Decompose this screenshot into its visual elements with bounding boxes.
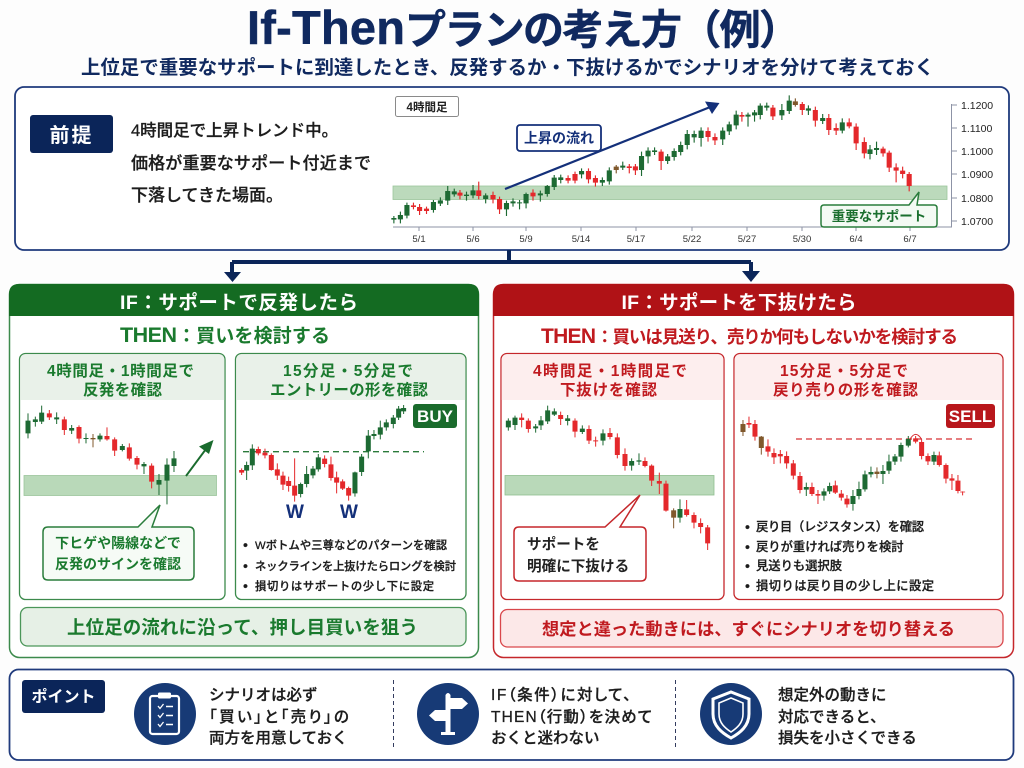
text: point 3: 想定外の動きに bbox=[778, 686, 887, 704]
sub-panel heading: 15分足・5分足で bbox=[283, 362, 413, 380]
y axis labels: 1.0700 bbox=[961, 216, 993, 228]
callout: rebound signs: 反発のサインを確認 bbox=[55, 556, 181, 572]
sub-panel heading: 反発を確認 bbox=[83, 380, 162, 399]
then heading: THEN bbox=[120, 323, 177, 347]
sub-panel heading: 下抜けを確認 bbox=[560, 380, 657, 399]
break chart bbox=[505, 406, 714, 550]
entry bullets: • bbox=[243, 578, 248, 594]
sub-panel heading bbox=[533, 362, 687, 399]
arrows: branch to scenarios bbox=[224, 250, 760, 282]
arrow: upward flow bbox=[505, 102, 720, 189]
premise text: 下落してきた場面。 bbox=[131, 186, 283, 205]
takeaway: buy the dip bbox=[20, 608, 466, 646]
pullback chart bbox=[743, 404, 995, 511]
callout: rebound signs bbox=[43, 505, 194, 580]
takeaway: switch scenario: 想定と違った動きには、すぐにシナリオを切り替える bbox=[542, 619, 955, 639]
panel: points bbox=[10, 670, 1014, 760]
x axis labels: 5/30 bbox=[793, 234, 811, 245]
label: upward flow bbox=[517, 125, 601, 151]
panel header bbox=[493, 284, 1014, 316]
sell bullets: • bbox=[745, 578, 750, 594]
panel header: IF：サポートで反発したら bbox=[120, 292, 358, 314]
x axis labels: 6/7 bbox=[903, 234, 917, 245]
sell bullets bbox=[745, 518, 934, 594]
entry bullets: ネックラインを上抜けたらロングを検討 bbox=[255, 559, 456, 573]
y axis labels: 1.0800 bbox=[961, 193, 993, 205]
sub-panel heading: 戻り売りの形を確認 bbox=[773, 380, 918, 399]
premise text: 4時間足で上昇トレンド中。 bbox=[131, 121, 338, 140]
panel header bbox=[9, 284, 479, 316]
entry bullets: • bbox=[243, 558, 248, 574]
text: point 1: シナリオは必ず bbox=[209, 686, 318, 704]
callout: rebound signs: 下ヒゲや陽線などで bbox=[55, 535, 181, 551]
callout: break: 明確に下抜ける bbox=[527, 557, 629, 575]
icon: shield bbox=[700, 683, 762, 745]
sell bullets: • bbox=[745, 558, 750, 574]
then heading: ：買いは見送り、売りか何もしないかを検討する bbox=[596, 327, 958, 347]
W labels: W bbox=[340, 502, 358, 523]
text: point 2 bbox=[491, 686, 652, 747]
x axis labels bbox=[412, 234, 917, 245]
panel header: IF：サポートを下抜けたら bbox=[622, 292, 856, 314]
y axis labels: 1.1000 bbox=[961, 146, 993, 158]
entry bullets: 損切りはサポートの少し下に設定 bbox=[255, 579, 434, 593]
premise badge bbox=[30, 115, 113, 153]
takeaway: switch scenario bbox=[500, 610, 1003, 647]
entry bullets bbox=[243, 536, 456, 594]
text: point 3: 損失を小さくできる bbox=[778, 729, 917, 747]
x axis labels: 5/6 bbox=[466, 234, 480, 245]
rebound chart bbox=[24, 406, 216, 504]
sub-panel heading: 4時間足・1時間足で bbox=[533, 362, 687, 380]
premise text: 価格が重要なサポート付近まで bbox=[131, 153, 371, 173]
W labels: W bbox=[286, 502, 304, 523]
premise text bbox=[131, 121, 371, 205]
SELL badge: SELL bbox=[949, 407, 992, 426]
entry bullets: • bbox=[243, 536, 248, 552]
sell bullets: 損切りは戻り目の少し上に設定 bbox=[756, 578, 934, 593]
panel: IF break bbox=[493, 284, 1014, 658]
text: point 1 bbox=[209, 686, 349, 747]
x axis labels: 5/22 bbox=[683, 234, 701, 245]
title: プランの考え方（例） bbox=[405, 7, 800, 53]
x axis labels: 5/27 bbox=[738, 234, 756, 245]
sell bullets: 戻りが重ければ売りを検討 bbox=[756, 539, 904, 554]
W labels bbox=[286, 502, 358, 523]
sub-panel: confirm break bbox=[501, 354, 724, 600]
icon: clipboard bbox=[134, 683, 196, 745]
x axis labels: 6/4 bbox=[849, 234, 863, 245]
label: upward flow: 上昇の流れ bbox=[524, 130, 594, 146]
x axis labels: 5/1 bbox=[412, 234, 426, 245]
points badge: ポイント bbox=[31, 688, 96, 706]
text: point 2: THEN（行動）を決めて bbox=[491, 708, 652, 726]
callout: important support bbox=[821, 192, 937, 227]
premise badge: 前提 bbox=[50, 124, 94, 147]
text: point 3 bbox=[778, 686, 917, 747]
double bottom chart bbox=[242, 404, 457, 523]
text: point 1: 「買い」と「売り」の bbox=[209, 708, 349, 726]
points badge bbox=[22, 680, 105, 713]
BUY badge: BUY bbox=[417, 407, 454, 426]
candles bbox=[394, 95, 909, 223]
callout: break bbox=[514, 495, 646, 581]
arrow: rebound bbox=[186, 440, 214, 476]
chart: 4 hour candlesticks bbox=[393, 95, 993, 245]
y axis labels bbox=[961, 100, 993, 228]
text: point 1: 両方を用意しておく bbox=[209, 729, 348, 747]
then heading: THEN bbox=[541, 325, 596, 348]
sub-panel: entry shape bbox=[236, 354, 466, 600]
sell bullets: • bbox=[745, 538, 750, 554]
timeframe label bbox=[396, 96, 458, 116]
text: point 3: 対応できると、 bbox=[778, 708, 886, 726]
text: point 2: おくと迷わない bbox=[491, 729, 600, 747]
sell bullets: • bbox=[745, 518, 750, 534]
sub-panel heading bbox=[47, 362, 194, 399]
x axis labels: 5/9 bbox=[519, 234, 533, 245]
y axis labels: 1.1200 bbox=[961, 100, 993, 112]
x axis labels: 5/17 bbox=[627, 234, 645, 245]
sub-panel heading bbox=[773, 362, 918, 399]
subtitle: 上位足で重要なサポートに到達したとき、反発するか・下抜けるかでシナリオを分けて考えておく bbox=[81, 56, 934, 79]
callout: important support: 重要なサポート bbox=[832, 209, 926, 224]
panel: premise bbox=[15, 87, 1009, 250]
sell bullets: 見送りも選択肢 bbox=[756, 558, 843, 573]
entry bullets: Wボトムや三尊などのパターンを確認 bbox=[255, 538, 448, 552]
text: point 2: IF（条件）に対して、 bbox=[491, 686, 631, 704]
icon: signpost bbox=[417, 683, 479, 745]
sub-panel heading bbox=[270, 362, 428, 399]
panel: IF rebound bbox=[9, 284, 479, 658]
callout: break: サポートを bbox=[527, 536, 600, 553]
sub-panel heading: エントリーの形を確認 bbox=[270, 380, 428, 399]
support band bbox=[393, 186, 947, 200]
timeframe label: 4時間足 bbox=[407, 100, 448, 114]
axes bbox=[393, 104, 957, 231]
then heading: ：買いを検討する bbox=[177, 325, 330, 347]
sub-panel heading: 4時間足・1時間足で bbox=[47, 362, 194, 380]
y axis labels: 1.0900 bbox=[961, 169, 993, 181]
title: If-Then bbox=[247, 1, 405, 54]
sub-panel: pullback sell bbox=[734, 354, 1003, 600]
sell bullets: 戻り目（レジスタンス）を確認 bbox=[756, 519, 925, 534]
takeaway: buy the dip: 上位足の流れに沿って、押し目買いを狙う bbox=[67, 617, 418, 638]
BUY badge bbox=[413, 404, 457, 428]
x axis labels: 5/14 bbox=[572, 234, 590, 245]
y axis labels: 1.1100 bbox=[961, 123, 992, 135]
sub-panel: confirm rebound bbox=[20, 354, 225, 600]
sub-panel heading: 15分足・5分足で bbox=[780, 362, 908, 380]
